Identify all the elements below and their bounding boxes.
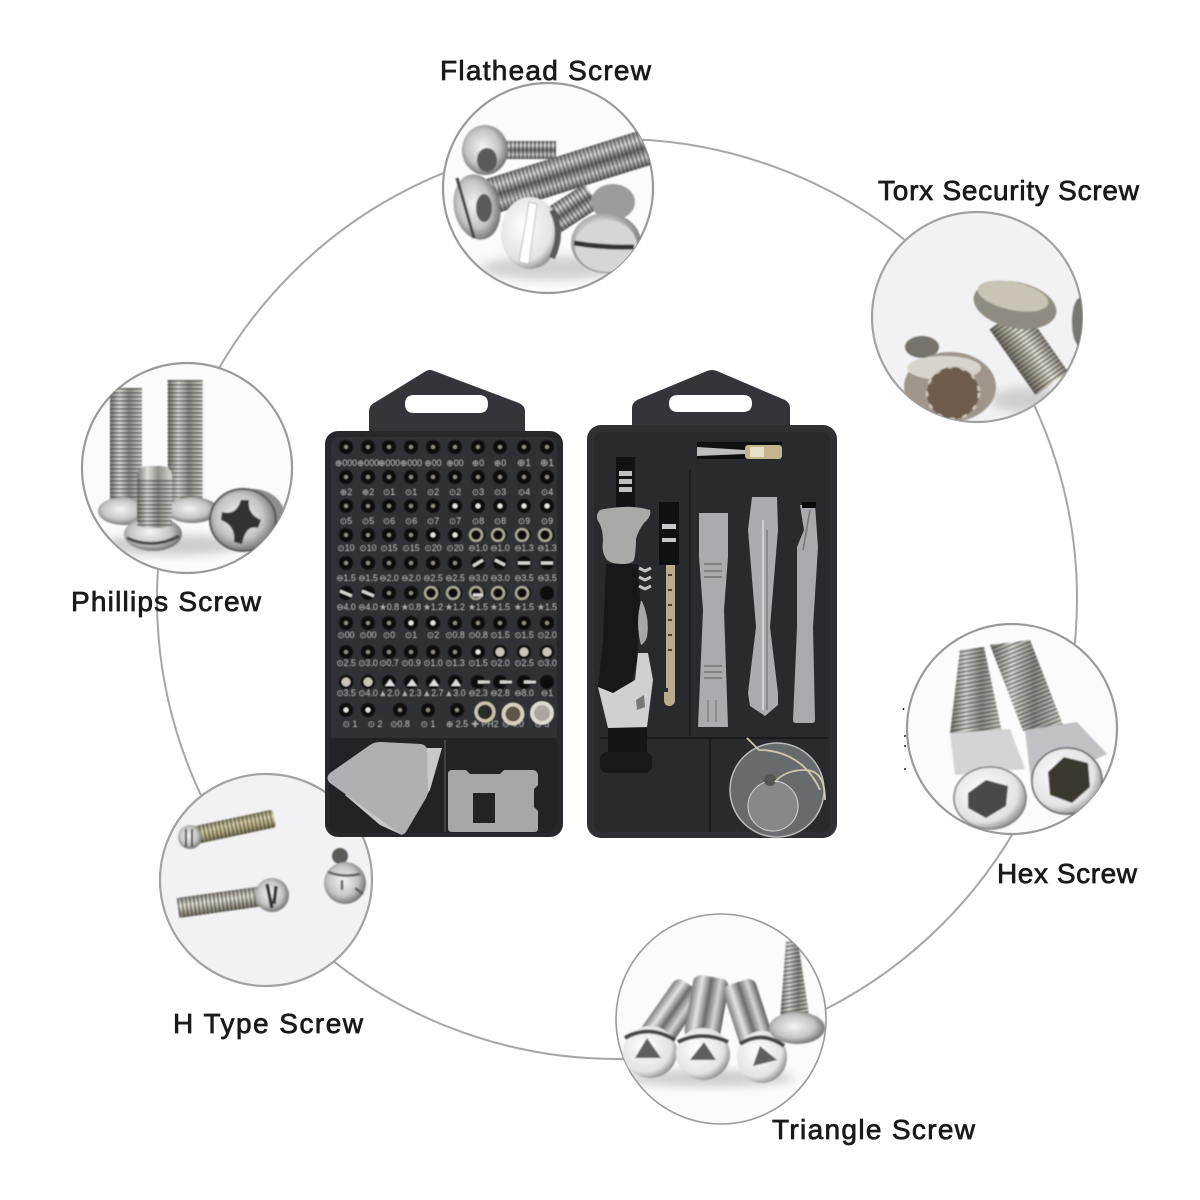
bit row 8 labels: ⊙1.5 xyxy=(468,658,488,668)
bit row 2 labels: ⊙4 xyxy=(518,487,530,497)
bit row 8 labels: ⊙2.5 xyxy=(514,658,534,668)
case body xyxy=(587,425,837,838)
bit row 3 labels xyxy=(340,516,553,526)
bit row 2 labels: ⊙2 xyxy=(449,487,461,497)
tall screw right xyxy=(166,380,218,523)
hook bit xyxy=(659,502,679,706)
bit row 3 labels: ⊙5 xyxy=(362,516,374,526)
ground shadow xyxy=(480,256,620,280)
case hang tab xyxy=(369,370,525,434)
bit row 2 labels: ⊙1 xyxy=(405,487,417,497)
bit row 5 labels xyxy=(336,573,557,583)
bit row 8 labels: ⊙1.3 xyxy=(445,658,465,668)
bit row 1 labels: ⊕00 xyxy=(424,458,442,468)
bit row 10 labels: ⊙ 1 xyxy=(343,719,357,729)
right hex screw xyxy=(990,640,1107,814)
front right screw xyxy=(571,184,641,273)
label: phillips: Phillips Screw xyxy=(71,586,262,617)
panel: hex screw photo xyxy=(907,624,1117,834)
bit row 6 labels: ★0.8 xyxy=(401,602,421,612)
panel: triangle screw photo xyxy=(616,914,826,1124)
bit row 5 labels: ⊖1.5 xyxy=(358,573,378,583)
bit row 7 labels xyxy=(337,630,557,640)
bit row 7 labels: ⊙0.8 xyxy=(468,630,488,640)
lower tray left xyxy=(329,738,557,833)
label: torx: Torx Security Screw xyxy=(878,175,1140,206)
bit row 3 labels: ⊙7 xyxy=(449,516,461,526)
suction cup xyxy=(730,738,825,837)
bit row 9 labels: ⊙3.5 xyxy=(336,688,356,698)
ground shadow xyxy=(100,535,240,555)
screw one xyxy=(622,978,693,1078)
bit row 4 labels: ⊙15 xyxy=(380,543,398,553)
bit row 10 labels: ⊙ 4.0 xyxy=(502,719,524,729)
bit row 4 labels: ⊙15 xyxy=(402,543,420,553)
bit row 5 labels: ⊖2.0 xyxy=(379,573,399,583)
upright H screw xyxy=(324,848,366,904)
label: hex: Hex Screw xyxy=(997,858,1138,889)
bit row 3 labels: ⊙8 xyxy=(494,516,506,526)
middle screw xyxy=(501,184,600,269)
bit row 6 labels: ★0.8 xyxy=(379,602,399,612)
bit row 2 labels: ⊙4 xyxy=(541,487,553,497)
bit row 3 labels: ⊙9 xyxy=(541,516,553,526)
small marks near hex circle xyxy=(904,708,905,770)
bit row 1 labels: ⊕00 xyxy=(446,458,464,468)
bit row 10 labels xyxy=(343,719,549,729)
bit row 7 labels: ⊙1.5 xyxy=(490,630,510,640)
bit row 5 labels: ⊖3.0 xyxy=(468,573,488,583)
bit row 2 labels: ⊕2 xyxy=(362,487,374,497)
bit row 3 labels: ⊙5 xyxy=(340,516,352,526)
bit row 9 labels: ▲2.0 xyxy=(379,688,400,698)
ground shadow xyxy=(625,1070,795,1086)
bit row 5 labels: ⊖3.5 xyxy=(537,573,557,583)
bit row 5 labels: ⊖2.0 xyxy=(401,573,421,583)
bit row 6 labels: ⊖4.0 xyxy=(336,602,356,612)
bit row 9 labels: ▲2.7 xyxy=(423,688,444,698)
bit row 6 labels: ★1.5 xyxy=(537,602,557,612)
large sockets xyxy=(476,703,552,724)
label: triangle: Triangle Screw xyxy=(772,1114,976,1145)
bit row 1 labels xyxy=(335,458,554,469)
panel: H type screw photo xyxy=(160,774,372,986)
bit row 7 labels: ⊙0 xyxy=(383,630,395,640)
bit row 4 labels: ⊖1.0 xyxy=(490,543,510,553)
left hex screw xyxy=(950,647,1026,829)
screw three xyxy=(721,977,787,1083)
bit row 5 labels: ⊖3.5 xyxy=(514,573,534,583)
bit row 7 labels: ⊙0.8 xyxy=(445,630,465,640)
bit row 2 labels: ⊙3 xyxy=(472,487,484,497)
bit row 8 labels: ⊙1.0 xyxy=(423,658,443,668)
bit row 3 labels: ⊙6 xyxy=(383,516,395,526)
panel: flathead screw photo xyxy=(443,83,661,293)
bit row 10 labels: ⊙ 2 xyxy=(368,719,382,729)
right screw xyxy=(972,280,1082,396)
bit row 2 labels xyxy=(340,487,553,497)
bit row 9 labels: ⊙4.0 xyxy=(358,688,378,698)
bit row 2 labels: ⊙2 xyxy=(427,487,439,497)
front torx screw xyxy=(904,336,996,422)
bit row 8 labels: ⊙2.0 xyxy=(490,658,510,668)
bit row 4 labels xyxy=(337,543,557,553)
bit row 8 labels: ⊙3.0 xyxy=(537,658,557,668)
screwdriver xyxy=(597,457,653,773)
phillips head xyxy=(210,489,285,551)
panel: left case with bits xyxy=(325,370,563,837)
pry tool two xyxy=(748,497,778,716)
panel: right case with tools xyxy=(587,370,837,838)
bit row 6 labels: ★1.5 xyxy=(490,602,510,612)
bit row 6 labels: ★1.2 xyxy=(445,602,465,612)
bit row 10 labels: ✚ PH2 xyxy=(472,719,499,729)
bit row 9 labels: ⊖2.8 xyxy=(490,688,510,698)
bit row 1 labels: ⊕1 xyxy=(540,458,554,469)
bit row 10 labels: ⊙0.8 xyxy=(390,719,410,729)
bit row 6 labels: ⊖4.0 xyxy=(358,602,378,612)
pry tool three xyxy=(793,502,818,723)
top H screw xyxy=(178,810,276,849)
bit row 9 labels: ⊖8.0 xyxy=(514,688,534,698)
bit row 5 labels: ⊖2.5 xyxy=(423,573,443,583)
bit row 9 labels: ⊖1 xyxy=(541,688,553,698)
long screw xyxy=(452,131,650,240)
bit row 9 labels xyxy=(336,688,553,698)
bit row 7 labels: ⊙00 xyxy=(359,630,377,640)
ground shadow xyxy=(990,388,1070,412)
panel: torx security screw photo xyxy=(872,212,1088,422)
case hang tab xyxy=(632,370,790,428)
bit row 5 labels: ⊖2.5 xyxy=(445,573,465,583)
bit row 9 labels: ▲2.3 xyxy=(401,688,422,698)
bit row 9 labels: ⊖2.3 xyxy=(468,688,488,698)
bit grid xyxy=(335,447,557,729)
bit row 8 labels: ⊙0.9 xyxy=(401,658,421,668)
bit row 4 labels: ⊖1.3 xyxy=(514,543,534,553)
opening picks xyxy=(328,742,442,835)
bit row 4 labels: ⊖1.3 xyxy=(537,543,557,553)
bit row 1 labels: ⊕1 xyxy=(517,458,531,469)
bit row 6 labels xyxy=(336,602,557,612)
bit row 4 labels: ⊙10 xyxy=(337,543,355,553)
bit row 10 labels: ⊕ 2.5 xyxy=(446,719,468,729)
short screw xyxy=(124,466,182,551)
panel: phillips screw photo xyxy=(82,363,292,573)
bit row 8 labels: ⊙2.5 xyxy=(336,658,356,668)
gray bit holder xyxy=(448,770,538,832)
bit row 9 labels: ▲3.0 xyxy=(445,688,466,698)
bit row 6 labels: ★1.5 xyxy=(468,602,488,612)
bit row 3 labels: ⊙6 xyxy=(405,516,417,526)
standing screw xyxy=(769,941,825,1044)
tall screw left xyxy=(98,388,148,525)
label: flathead: Flathead Screw xyxy=(440,55,652,86)
case body xyxy=(325,431,563,837)
bit row 1 labels: ⊕000 xyxy=(357,458,379,468)
bit row 4 labels: ⊖1.0 xyxy=(468,543,488,553)
bit row 7 labels: ⊙2 xyxy=(427,630,439,640)
bit row 2 labels: ⊕2 xyxy=(340,487,352,497)
bit row 2 labels: ⊙3 xyxy=(494,487,506,497)
bit row 2 labels: ⊙1 xyxy=(383,487,395,497)
bit row 1 labels: ⊕0 xyxy=(494,458,506,468)
pry tool one xyxy=(698,513,728,727)
bit row 7 labels: ⊙2.0 xyxy=(537,630,557,640)
bit row 8 labels: ⊙0.7 xyxy=(379,658,399,668)
bit row 1 labels: ⊕000 xyxy=(335,458,357,468)
bit row 10 labels: ⊙ 1 xyxy=(421,719,435,729)
bit row 3 labels: ⊙9 xyxy=(518,516,530,526)
bit row 4 labels: ⊙20 xyxy=(424,543,442,553)
bit row 5 labels: ⊖3.0 xyxy=(490,573,510,583)
bit row 3 labels: ⊙8 xyxy=(472,516,484,526)
connecting ring xyxy=(157,139,1077,1059)
back screw xyxy=(462,125,556,175)
bit row 6 labels: ★1.5 xyxy=(514,602,534,612)
bit row 1 labels: ⊕000 xyxy=(378,458,400,468)
screw two xyxy=(676,974,730,1080)
bit row 6 labels: ★1.2 xyxy=(423,602,443,612)
tray dividers xyxy=(600,738,828,832)
bit row 4 labels: ⊙10 xyxy=(359,543,377,553)
bit row 5 labels: ⊖1.5 xyxy=(336,573,356,583)
bit row 10 labels: ⊙ 5 xyxy=(535,719,549,729)
bit row 7 labels: ⊙00 xyxy=(337,630,355,640)
bit row 1 labels: ⊕0 xyxy=(472,458,484,468)
bit row 7 labels: ⊙1 xyxy=(405,630,417,640)
bit row 8 labels: ⊙3.0 xyxy=(358,658,378,668)
bit row 1 labels: ⊕000 xyxy=(400,458,422,468)
bit row 4 labels: ⊙20 xyxy=(446,543,464,553)
label: H type: H Type Screw xyxy=(173,1008,364,1039)
bit row 7 labels: ⊙1.5 xyxy=(514,630,534,640)
lower H screw xyxy=(177,878,289,918)
adapter bar xyxy=(697,442,782,459)
bit row 8 labels xyxy=(336,658,557,668)
bit row 3 labels: ⊙7 xyxy=(427,516,439,526)
